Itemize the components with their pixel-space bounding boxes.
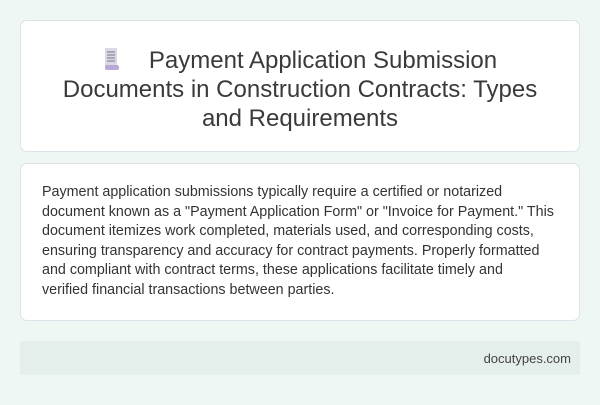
description text: Payment application submissions typically require a certified or notarized (42, 184, 502, 200)
description text: ensuring transparency and accuracy for contract payments. Properly formatted (42, 243, 539, 259)
title: Payment Application Submission (149, 47, 497, 74)
title (63, 47, 537, 132)
title: and Requirements (202, 105, 398, 132)
description text: document known as a "Payment Application Form" or "Invoice for Payment." This (42, 204, 554, 220)
description text (42, 184, 554, 298)
title card (20, 20, 580, 152)
description panel (20, 163, 580, 321)
footer (20, 341, 580, 375)
title: Documents in Construction Contracts: Types (63, 76, 537, 103)
description text: document itemizes work completed, materials used, and corresponding costs, (42, 223, 534, 239)
icon: receipt (105, 48, 119, 70)
description text: verified financial transactions between parties. (42, 282, 334, 298)
description text: and compliant with contract terms, these applications facilitate timely and (42, 262, 503, 278)
footer text: docutypes.com (484, 351, 571, 366)
